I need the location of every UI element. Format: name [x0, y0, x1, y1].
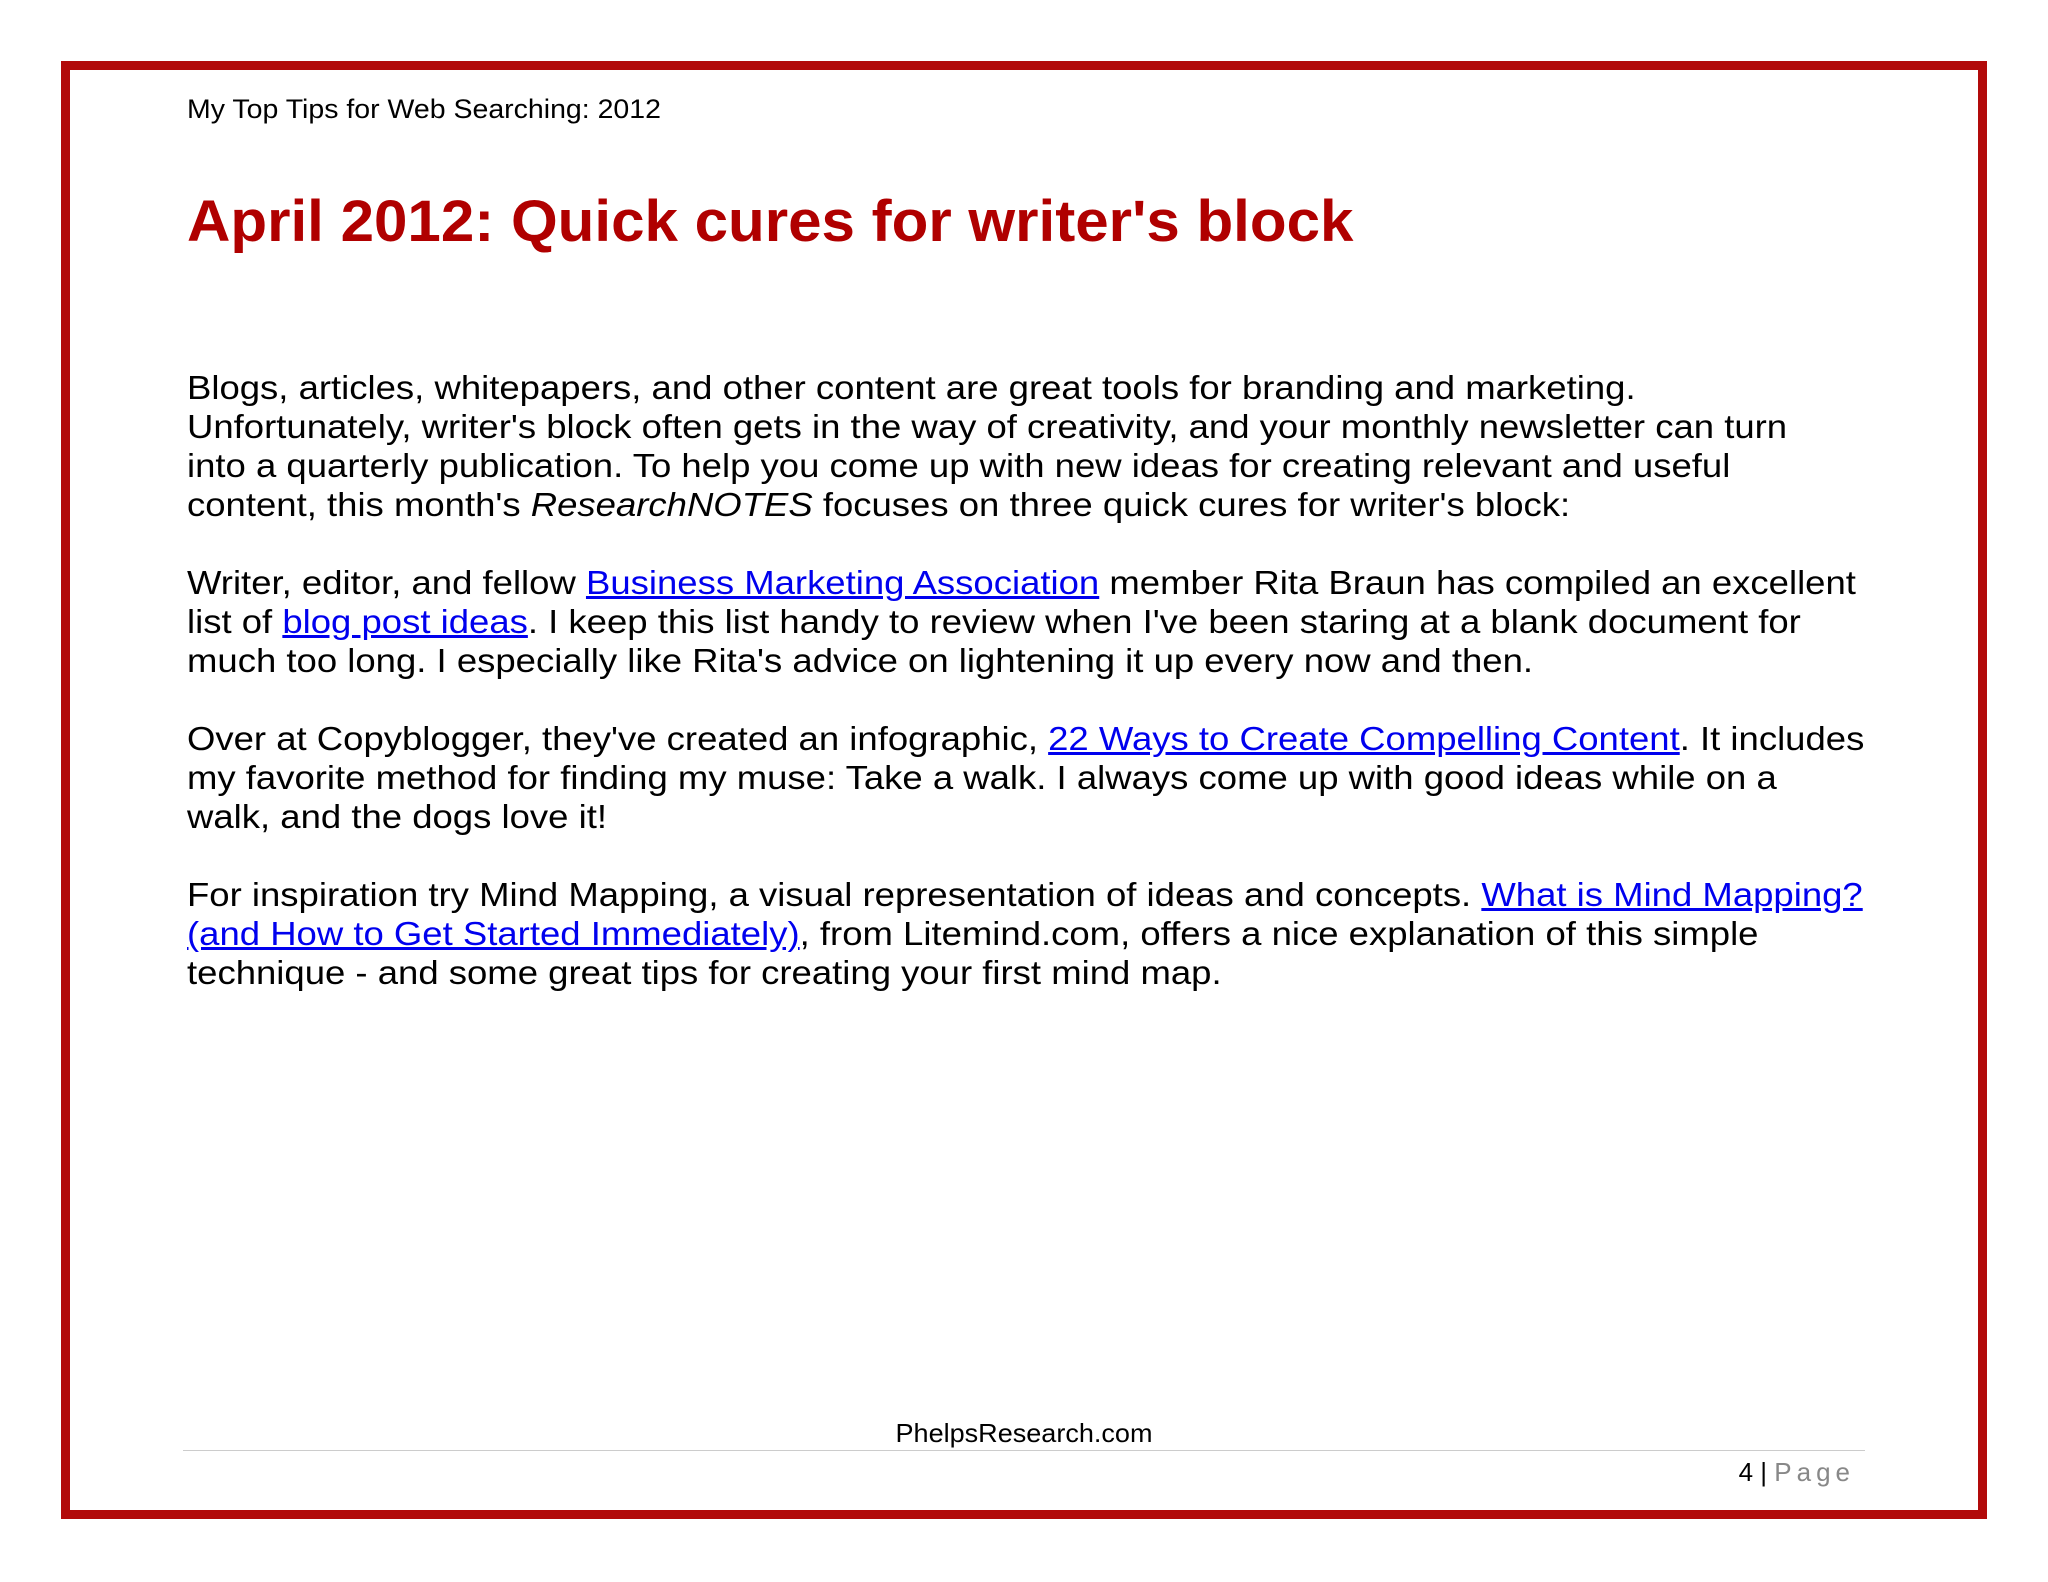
- footer site name: PhelpsResearch.com: [895, 1418, 1153, 1448]
- paragraph: mind mapping: (and How to Get Started Immediately), from Litemind.com, offers a nice explanation of this simple: [187, 915, 1758, 952]
- paragraph: copyblogger: my favorite method for finding my muse: Take a walk. I always come up with good ideas while on a: [187, 759, 1777, 796]
- paragraph: intro: Blogs, articles, whitepapers, and other content are great tools for branding and marketing.: [187, 369, 1636, 406]
- paragraph: blog post ideas: Writer, editor, and fellow Business Marketing Association member Rita Braun has compiled an excellent: [187, 564, 1856, 601]
- paragraph: blog post ideas: list of blog post ideas. I keep this list handy to review when I've been staring at a blank document for: [187, 603, 1801, 640]
- paragraph: copyblogger: walk, and the dogs love it!: [187, 798, 607, 835]
- paragraph: copyblogger: Over at Copyblogger, they've created an infographic, 22 Ways to Create Compelling Content. It includes: [187, 720, 1864, 757]
- paragraph: intro: Unfortunately, writer's block often gets in the way of creativity, and your monthly newsletter can turn: [187, 408, 1787, 445]
- paragraph: intro: [187, 369, 1787, 523]
- paragraph: mind mapping: For inspiration try Mind Mapping, a visual representation of ideas and concepts. What is Mind Mapping?: [187, 876, 1863, 913]
- title: April 2012: Quick cures for writer's block: [187, 189, 1353, 254]
- paragraph: mind mapping: technique - and some great tips for creating your first mind map.: [187, 954, 1222, 991]
- paragraph: blog post ideas: [187, 564, 1856, 679]
- paragraph: intro: into a quarterly publication. To help you come up with new ideas for creating relevant and useful: [187, 447, 1730, 484]
- page number: 4 | Page: [1739, 1457, 1855, 1487]
- paragraph: mind mapping: [187, 876, 1863, 991]
- paragraph: intro: content, this month's ResearchNOTES focuses on three quick cures for writer's block:: [187, 486, 1570, 523]
- paragraph: blog post ideas: much too long. I especially like Rita's advice on lightening it up every now and then.: [187, 642, 1533, 679]
- paragraph: copyblogger: [187, 720, 1864, 835]
- header text: My Top Tips for Web Searching: 2012: [187, 94, 661, 124]
- body text: [187, 369, 1864, 991]
